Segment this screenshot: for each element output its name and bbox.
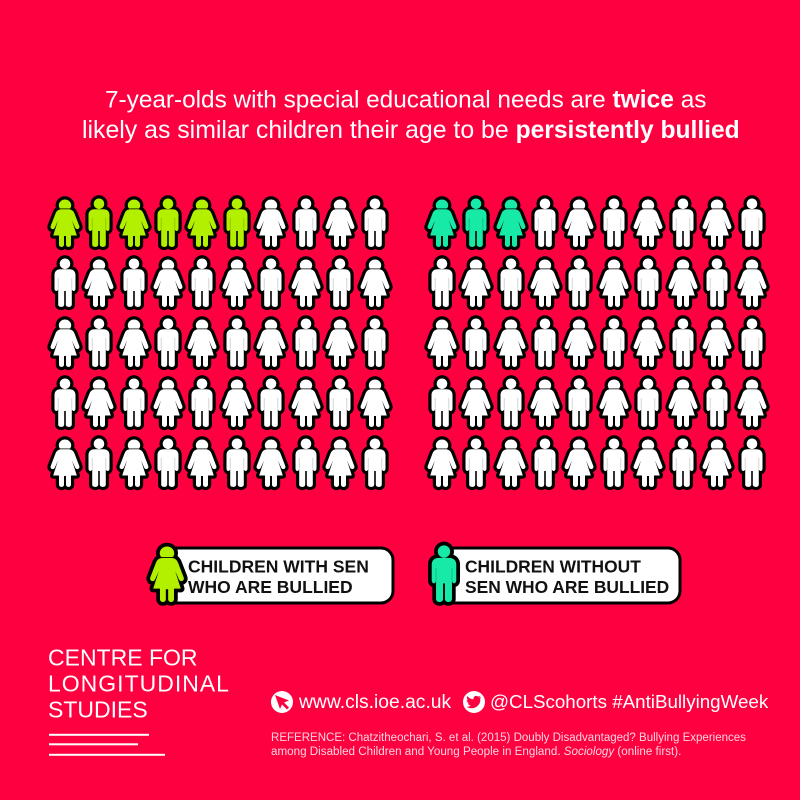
icon: teal male figure [432,545,456,602]
row 4 [432,378,766,427]
logo: Centre for Longitudinal Studies [48,644,230,756]
row 4 [54,378,389,427]
twitter handle and hashtag: @CLScohorts #AntiBullyingWeek [490,691,769,712]
legend: children with SEN who are bullied [150,547,393,603]
row 3 [51,318,386,367]
row 1 with six bullied children highlighted [51,198,386,247]
row 1 with three bullied children highlighted [428,198,762,247]
row 5 [51,438,386,487]
website link: www.cls.ioe.ac.uk [298,692,452,713]
legend label: SEN WHO ARE BULLIED [465,577,669,597]
icon: lime female figure [150,547,184,602]
reference citation: REFERENCE: Chatzitheochari, S. et al. (2015) Doubly Disadvantaged? Bullying Experiences [271,732,746,744]
row 2 [432,258,766,307]
title: likely as similar children their age to be persistently bullied [82,117,740,144]
icon: cursor [271,691,293,713]
row 3 [428,318,762,367]
row 2 [54,258,389,307]
logo: Centre for Longitudinal Studies: CENTRE FOR [48,644,198,670]
pictogram: children with SEN [51,198,389,487]
logo: Centre for Longitudinal Studies: LONGITUDINAL [48,670,230,696]
legend: children without SEN who are bullied [432,545,680,603]
legend label: WHO ARE BULLIED [188,577,353,597]
title [82,86,740,144]
row 5 [428,438,762,487]
pictogram: children without SEN [428,198,766,487]
logo: Centre for Longitudinal Studies: STUDIES [48,696,148,722]
legend label: CHILDREN WITHOUT [465,556,641,576]
title: 7-year-olds with special educational needs are twice as [105,86,706,114]
legend label: CHILDREN WITH SEN [188,556,369,576]
reference citation: among Disabled Children and Young People in England. Sociology (online first). [271,745,681,758]
icon: twitter bird [463,691,485,713]
